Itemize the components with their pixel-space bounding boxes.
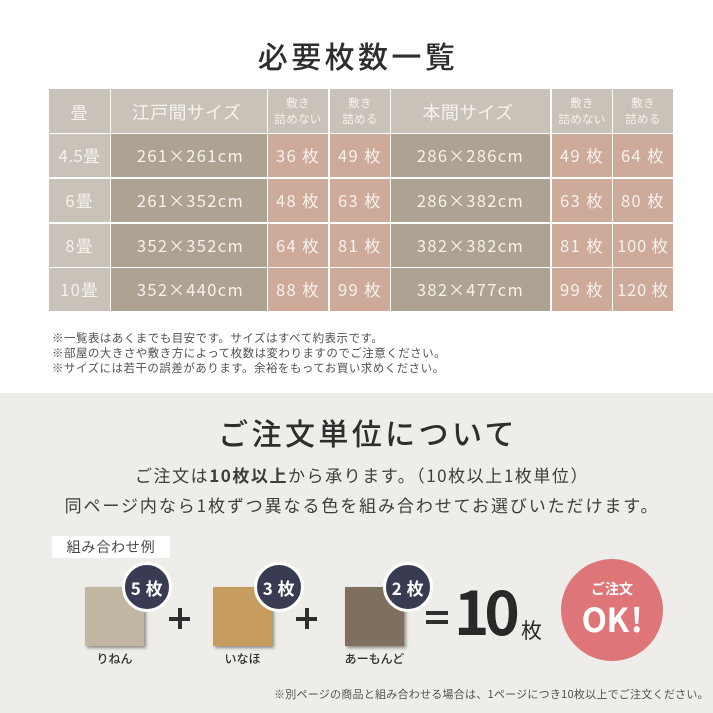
header: 江戸間サイズ (111, 89, 267, 133)
header: 敷き詰める: 詰める (625, 111, 661, 127)
total: 10枚: 枚 (521, 615, 542, 645)
notes under table (52, 330, 446, 376)
row: 4.5畳: 4.5畳 (59, 142, 100, 166)
badge: order OK (561, 559, 663, 661)
badge: 2枚 (383, 562, 433, 612)
swatch: いなほ: いなほ (224, 650, 260, 667)
row: 8畳: 64 枚 (276, 232, 320, 256)
row: 6畳 (49, 179, 673, 222)
total: 10枚 (454, 566, 542, 653)
order description (65, 462, 659, 517)
row: 6畳: 286×382cm (417, 188, 524, 212)
row: 6畳: 6畳 (65, 188, 94, 212)
header: 敷き詰めない: 詰めない (274, 111, 322, 127)
row: 6畳: 48 枚 (276, 188, 320, 212)
plus (169, 608, 190, 629)
title: 必要枚数一覧 (258, 33, 458, 77)
row: 8畳: 81 枚 (338, 232, 382, 256)
header: 敷き詰めない: 詰めない (558, 111, 606, 127)
notes under table: ※部屋の大きさや敷き方によって枚数は変わりますのでご注意ください。 (52, 345, 446, 361)
equals sign (426, 611, 448, 624)
row: 10畳: 382×477cm (417, 276, 524, 300)
header: 敷き詰める (330, 89, 390, 133)
header: 敷き詰めない (552, 89, 612, 133)
row: 10畳: 99 枚 (338, 276, 382, 300)
swatch: あーもんど (345, 587, 408, 667)
row: 4.5畳: 64 枚 (621, 142, 665, 166)
row: 8畳: 81 枚 (560, 232, 604, 256)
row: 4.5畳: 286×286cm (417, 142, 524, 166)
row: 10畳: 120 枚 (617, 276, 669, 300)
badge: 3枚 (254, 562, 304, 612)
notes under table: ※一覧表はあくまでも目安です。サイズはすべて約表示です。 (52, 330, 383, 346)
row: 6畳: 261×352cm (137, 188, 244, 212)
badge: 5枚: 5 枚 (131, 574, 163, 600)
row: 6畳: 80 枚 (621, 188, 665, 212)
total: 10枚: 10 (454, 566, 515, 653)
header: 畳 (49, 89, 110, 133)
row: 8畳: 352×352cm (137, 232, 244, 256)
swatch: あーもんど: あーもんど (345, 650, 404, 667)
panel: order unit (0, 393, 713, 713)
row: 10畳: 352×440cm (137, 276, 244, 300)
header: 本間サイズ (391, 89, 550, 133)
badge: 3枚: 3 枚 (263, 574, 295, 600)
row: 8畳: 382×382cm (417, 232, 524, 256)
plus (296, 608, 317, 629)
header: 敷き詰めない: 敷き (286, 95, 310, 111)
order description: 同ページ内なら1枚ずつ異なる色を組み合わせてお選びいただけます。 (65, 492, 659, 517)
label: combination example: 組み合わせ例 (67, 537, 155, 557)
header: 敷き詰めない (268, 89, 328, 133)
label: combination example (52, 536, 170, 558)
row: 8畳: 100 枚 (617, 232, 669, 256)
row: 4.5畳 (49, 134, 673, 177)
header: 敷き詰める: 敷き (631, 95, 655, 111)
header: 敷き詰めない: 敷き (570, 95, 594, 111)
swatch: りねん (85, 587, 148, 667)
order description: ご注文は10枚以上から承ります。（10枚以上1枚単位） (135, 462, 589, 487)
badge: order OK: OK ! (582, 594, 642, 642)
row: 4.5畳: 49 枚 (338, 142, 382, 166)
badge: 5枚 (122, 562, 172, 612)
badge: 2枚: 2 枚 (392, 574, 424, 600)
header: 畳: 畳 (70, 98, 88, 124)
row: 10畳: 99 枚 (560, 276, 604, 300)
row: 4.5畳: 36 枚 (276, 142, 320, 166)
badge: order OK: ご注文 (591, 579, 633, 599)
row: 4.5畳: 261×261cm (137, 142, 244, 166)
row: 8畳: 8畳 (65, 232, 94, 256)
heading: order unit: ご注文単位について (218, 410, 518, 454)
table: required tile counts (49, 89, 673, 311)
header: 江戸間サイズ: 江戸間サイズ (132, 98, 241, 124)
footnote: ※別ページの商品と組み合わせる場合は、1ページにつき10枚以上でご注文ください。 (274, 686, 709, 702)
header: 敷き詰める: 敷き (348, 95, 372, 111)
row: 8畳 (49, 224, 673, 267)
row: 6畳: 63 枚 (560, 188, 604, 212)
swatch: りねん: りねん (96, 650, 132, 667)
row: 10畳: 88 枚 (276, 276, 320, 300)
header: 敷き詰める (613, 89, 673, 133)
header: 本間サイズ: 本間サイズ (423, 98, 513, 124)
row: 4.5畳: 49 枚 (560, 142, 604, 166)
notes under table: ※サイズには若干の誤差があります。余裕をもってお買い求めください。 (52, 360, 445, 376)
header: 敷き詰める: 詰める (342, 111, 378, 127)
row: 10畳: 10畳 (60, 276, 99, 300)
row: 10畳 (49, 268, 673, 311)
row: 6畳: 63 枚 (338, 188, 382, 212)
swatch: いなほ (213, 587, 276, 667)
